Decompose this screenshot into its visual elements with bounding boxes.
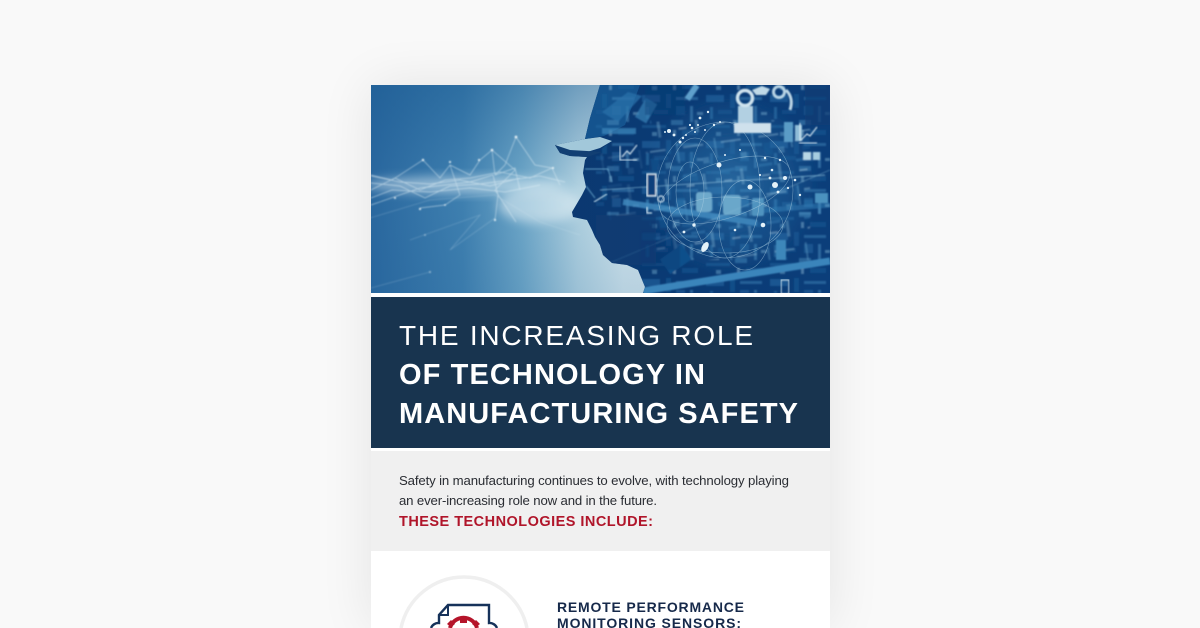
icon: document with gear <box>401 577 527 628</box>
intro text <box>399 473 789 508</box>
title text: THE INCREASING ROLE <box>399 320 753 351</box>
worker head silhouette <box>555 85 830 293</box>
item heading: REMOTE PERFORMANCE <box>557 599 744 615</box>
bottom right equipment outline <box>781 280 789 294</box>
hero background gradient <box>371 85 645 293</box>
line chart icon right <box>799 123 817 143</box>
robot arm and equipment <box>734 86 791 133</box>
safety glasses <box>585 169 612 198</box>
cap brim <box>555 137 612 152</box>
infographic card <box>371 85 830 628</box>
title text: MANUFACTURING SAFETY <box>399 398 798 430</box>
globe wireframe <box>652 122 798 270</box>
intro text: an ever-increasing role now and in the future. <box>399 493 657 508</box>
item heading <box>557 599 744 628</box>
line chart icon left <box>620 145 637 160</box>
subheading: THESE TECHNOLOGIES INCLUDE: <box>399 514 653 530</box>
title banner <box>371 297 830 448</box>
circuit blocks <box>596 84 830 293</box>
technology item: remote sensors <box>401 577 744 628</box>
title text: OF TECHNOLOGY IN <box>399 359 705 391</box>
hero image: worker silhouette with technology overlay <box>365 84 830 294</box>
intro panel <box>371 451 830 551</box>
phone icon <box>647 174 664 213</box>
globe particles <box>664 111 801 253</box>
circuit board and globe overlay <box>585 84 830 293</box>
data stream network <box>365 136 582 288</box>
intro text: Safety in manufacturing continues to evolve, with technology playing <box>399 473 789 488</box>
title text <box>399 320 798 430</box>
